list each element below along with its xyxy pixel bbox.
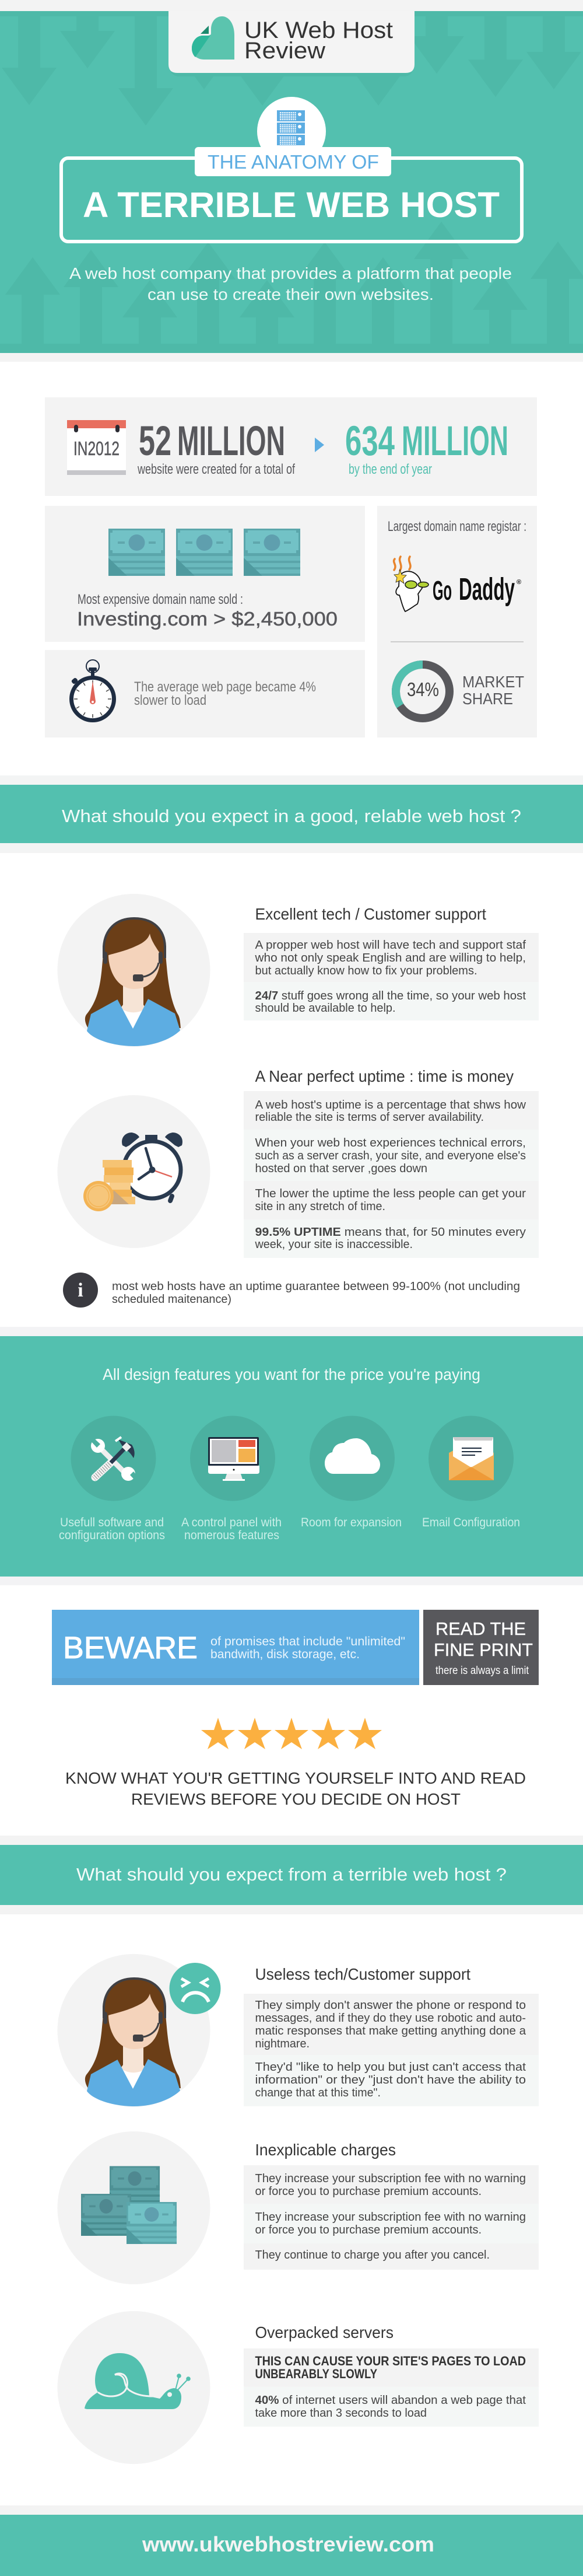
intro text [69,264,512,303]
logo tab [168,11,415,76]
info note: scheduled maitenance) [112,1293,231,1306]
stat: 52 million: 52 [139,418,171,464]
header background [0,0,583,362]
subtitle plate [195,147,391,176]
domain value: Investing.com > $2,450,000 [77,608,338,630]
section banner: terrible host: What should you expect from a terrible web host ? [76,1864,507,1885]
caption: website were created for a total of [137,462,295,477]
panel: expensive domain [45,506,365,642]
block: useless support: They simply don't answer the phone or respond to [255,1999,526,2012]
block: inexplicable charges: or force you to purchase premium accounts. [255,2224,482,2236]
block: inexplicable charges: Inexplicable charges [255,2141,396,2159]
panel: design features [0,1327,583,1585]
block: excellent support: 24/7 stuff goes wrong all the time, so your web host [255,990,526,1002]
speed text: The average web page became 4% [134,679,316,695]
panel: read the fine print [423,1610,539,1685]
block: near perfect uptime: such as a server crash, your site, and everyone else's [255,1149,526,1162]
feature captions: Room for expansion [301,1516,402,1529]
block: near perfect uptime: A web host's uptime is a percentage that shws how [255,1099,526,1112]
icon: info [63,1273,98,1308]
block: near perfect uptime: reliable the site is terms of server availability. [255,1111,484,1124]
panel: beware: of promises that include "unlimited" [210,1635,405,1648]
reviews statement [65,1769,526,1808]
speed text [134,679,316,708]
title block [61,97,522,242]
footer: www.ukwebhostreview.com [142,2532,434,2556]
icon: bills [108,529,300,576]
icon: logo heart [192,16,234,60]
block: useless support: They'd "like to help you but just can't access that [255,2061,526,2074]
block: overpacked servers: take more than 3 seconds to load [255,2407,427,2420]
stat: 634 million: MILLION [402,418,508,464]
panel: read the fine print: READ THE [436,1619,526,1639]
logo: go daddy: Go [433,575,452,606]
section banner: good host: What should you expect in a good, relable web host ? [62,806,521,826]
stat: 52 million: MILLION [177,418,285,464]
icon: alarm clock [122,1133,182,1201]
block: near perfect uptime: site in any stretch of time. [255,1200,385,1213]
illustration: stacks of bills [57,2131,210,2284]
icon: calendar [67,420,126,475]
block: useless support: Useless tech/Customer support [255,1965,470,1983]
info note: most web hosts have an uptime guarantee between 99-100% (not uncluding [112,1280,520,1293]
block: near perfect uptime: A Near perfect uptime : time is money [255,1067,514,1085]
block: overpacked servers: THIS CAN CAUSE YOUR SITE'S PAGES TO LOAD [255,2354,526,2368]
feature: email [429,1415,514,1501]
block: overpacked servers: Overpacked servers [255,2323,394,2341]
feature captions [59,1516,520,1542]
block: near perfect uptime: When your web host experiences technical errors, [255,1137,526,1149]
block: overpacked servers [244,2323,539,2427]
block: excellent support: but actually know how to fix your problems. [255,964,477,977]
logo: go daddy [394,557,521,611]
block: inexplicable charges: or force you to purchase premium accounts. [255,2185,482,2198]
logo text: UK Web Host [244,18,393,43]
feature captions: Email Configuration [422,1516,520,1529]
info note [63,1273,520,1308]
panel: beware [52,1610,419,1685]
intro text: A web host company that provides a platform that people [69,264,512,282]
block: useless support: nightmare. [255,2037,310,2050]
feature captions: A control panel with [181,1516,282,1529]
panel: page speed [45,650,365,738]
chart: market share donut [396,665,449,718]
market share label: MARKET [462,673,524,691]
block: inexplicable charges: They increase your subscription fee with no warning [255,2211,526,2224]
registrar label: Largest domain name registar : [388,519,526,534]
logo text: Review [244,38,325,64]
feature: tools [71,1415,156,1501]
stat: 634 million [345,418,508,464]
feature captions: Usefull software and [60,1516,164,1529]
icon: server in circle [257,97,326,166]
block: near perfect uptime: 99.5% UPTIME means that, for 50 minutes every [255,1226,526,1239]
block: excellent support [244,905,539,1020]
panel: beware: bandwith, disk storage, etc. [210,1648,360,1661]
block: near perfect uptime [244,1067,539,1258]
block: near perfect uptime: week, your site is inaccessible. [255,1238,413,1251]
block: useless support: information" or they "just don't have the ability to [255,2074,526,2086]
market share label: SHARE [462,690,513,708]
intro text: can use to create their own websites. [147,285,434,303]
block: near perfect uptime: The lower the uptime the less people can get your [255,1187,526,1200]
main title: A TERRIBLE WEB HOST [83,185,500,225]
stat: 634 million: 634 [345,418,395,464]
illustration: angry support agent [57,1954,220,2107]
icon: angry face [169,1963,220,2014]
logo: go daddy: ® [517,579,521,586]
market share label [462,673,524,708]
feature captions: nomerous features [184,1529,279,1542]
block: inexplicable charges: They continue to charge you after you cancel. [255,2249,490,2262]
block: useless support: change that at this time". [255,2086,381,2099]
block: useless support: messages, and if they do they use robotic and auto- [255,2012,526,2025]
icon: snail [85,2353,191,2409]
domain label: Most expensive domain name sold : [78,592,243,607]
section banner: good host [0,775,583,853]
block: useless support: matic responses that make getting anything done a [255,2025,526,2037]
arrow [315,438,324,452]
icon: info: i [78,1280,83,1301]
illustration: support agent [57,894,210,1047]
block: useless support [244,1965,539,2106]
block: inexplicable charges [244,2141,539,2270]
chart: market share donut: 34% [407,679,439,700]
feature: monitor [190,1415,275,1501]
panel: godaddy market share [377,506,537,738]
panel: websites created [45,397,537,496]
caption: by the end of year [349,462,432,477]
speed text: slower to load [134,693,206,708]
reviews statement: REVIEWS BEFORE YOU DECIDE ON HOST [131,1790,461,1808]
block: overpacked servers: UNBEARABLY SLOWLY [255,2367,377,2381]
logo text [244,18,393,64]
block: excellent support: A propper web host will have tech and support staf [255,939,526,952]
panel: read the fine print: there is always a limit [436,1665,529,1677]
feature captions: configuration options [59,1529,165,1542]
section banner: terrible host [0,1836,583,1914]
block: near perfect uptime: hosted on that server ,goes down [255,1162,427,1175]
block: inexplicable charges: They increase your subscription fee with no warning [255,2172,526,2185]
icon: five stars [201,1718,382,1749]
feature: cloud [310,1415,395,1501]
footer [0,2505,583,2576]
block: excellent support: should be available to help. [255,1002,395,1015]
block: excellent support: Excellent tech / Customer support [255,905,486,923]
icon: stopwatch [71,660,114,720]
block: excellent support: who not only speak English and are willing to help, [254,952,526,964]
reviews statement: KNOW WHAT YOU'R GETTING YOURSELF INTO AND READ [65,1769,526,1787]
stat: 52 million [139,418,285,464]
block: overpacked servers: 40% of internet users will abandon a web page that [255,2394,526,2407]
icon: coins [83,1160,135,1211]
features heading: All design features you want for the price you're paying [103,1365,480,1383]
panel: read the fine print: FINE PRINT [434,1640,533,1660]
icon: calendar: IN2012 [73,438,120,459]
illustration: snail [57,2311,210,2464]
illustration: clock and coins [57,1095,210,1248]
logo: go daddy: Daddy [459,572,515,607]
the anatomy of: THE ANATOMY OF [208,151,379,173]
panel: beware: BEWARE [63,1631,198,1665]
title frame [61,158,522,242]
